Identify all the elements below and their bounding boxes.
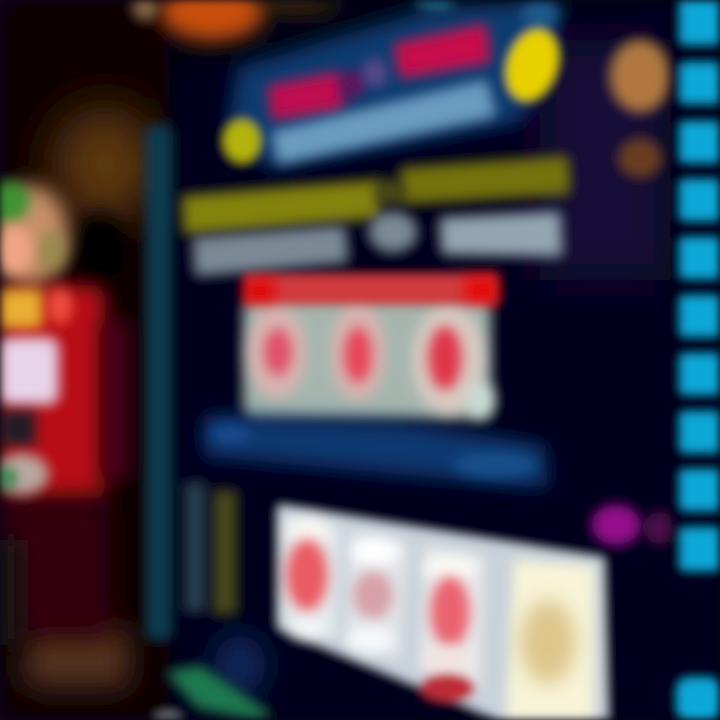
lower reels	[278, 505, 608, 720]
left dark surroundings	[0, 0, 170, 720]
right cyan light column	[672, 0, 720, 720]
sign pink lettering	[268, 72, 344, 120]
sign light-blue band	[272, 80, 496, 164]
green base strip	[154, 635, 272, 720]
top orange light	[133, 0, 335, 40]
sign plate	[228, 0, 560, 168]
orange side lights	[610, 40, 670, 178]
red reel header	[245, 274, 497, 305]
top sign	[223, 0, 567, 168]
purple light	[592, 505, 676, 545]
yellow ornaments	[497, 22, 567, 108]
blue text band	[204, 415, 548, 488]
white headline band	[193, 212, 562, 276]
left red machine	[0, 182, 130, 645]
yellow headline band	[182, 156, 570, 234]
machine cabinet	[146, 0, 672, 720]
upper reels	[244, 300, 494, 418]
green and yellow side strips	[184, 482, 237, 615]
